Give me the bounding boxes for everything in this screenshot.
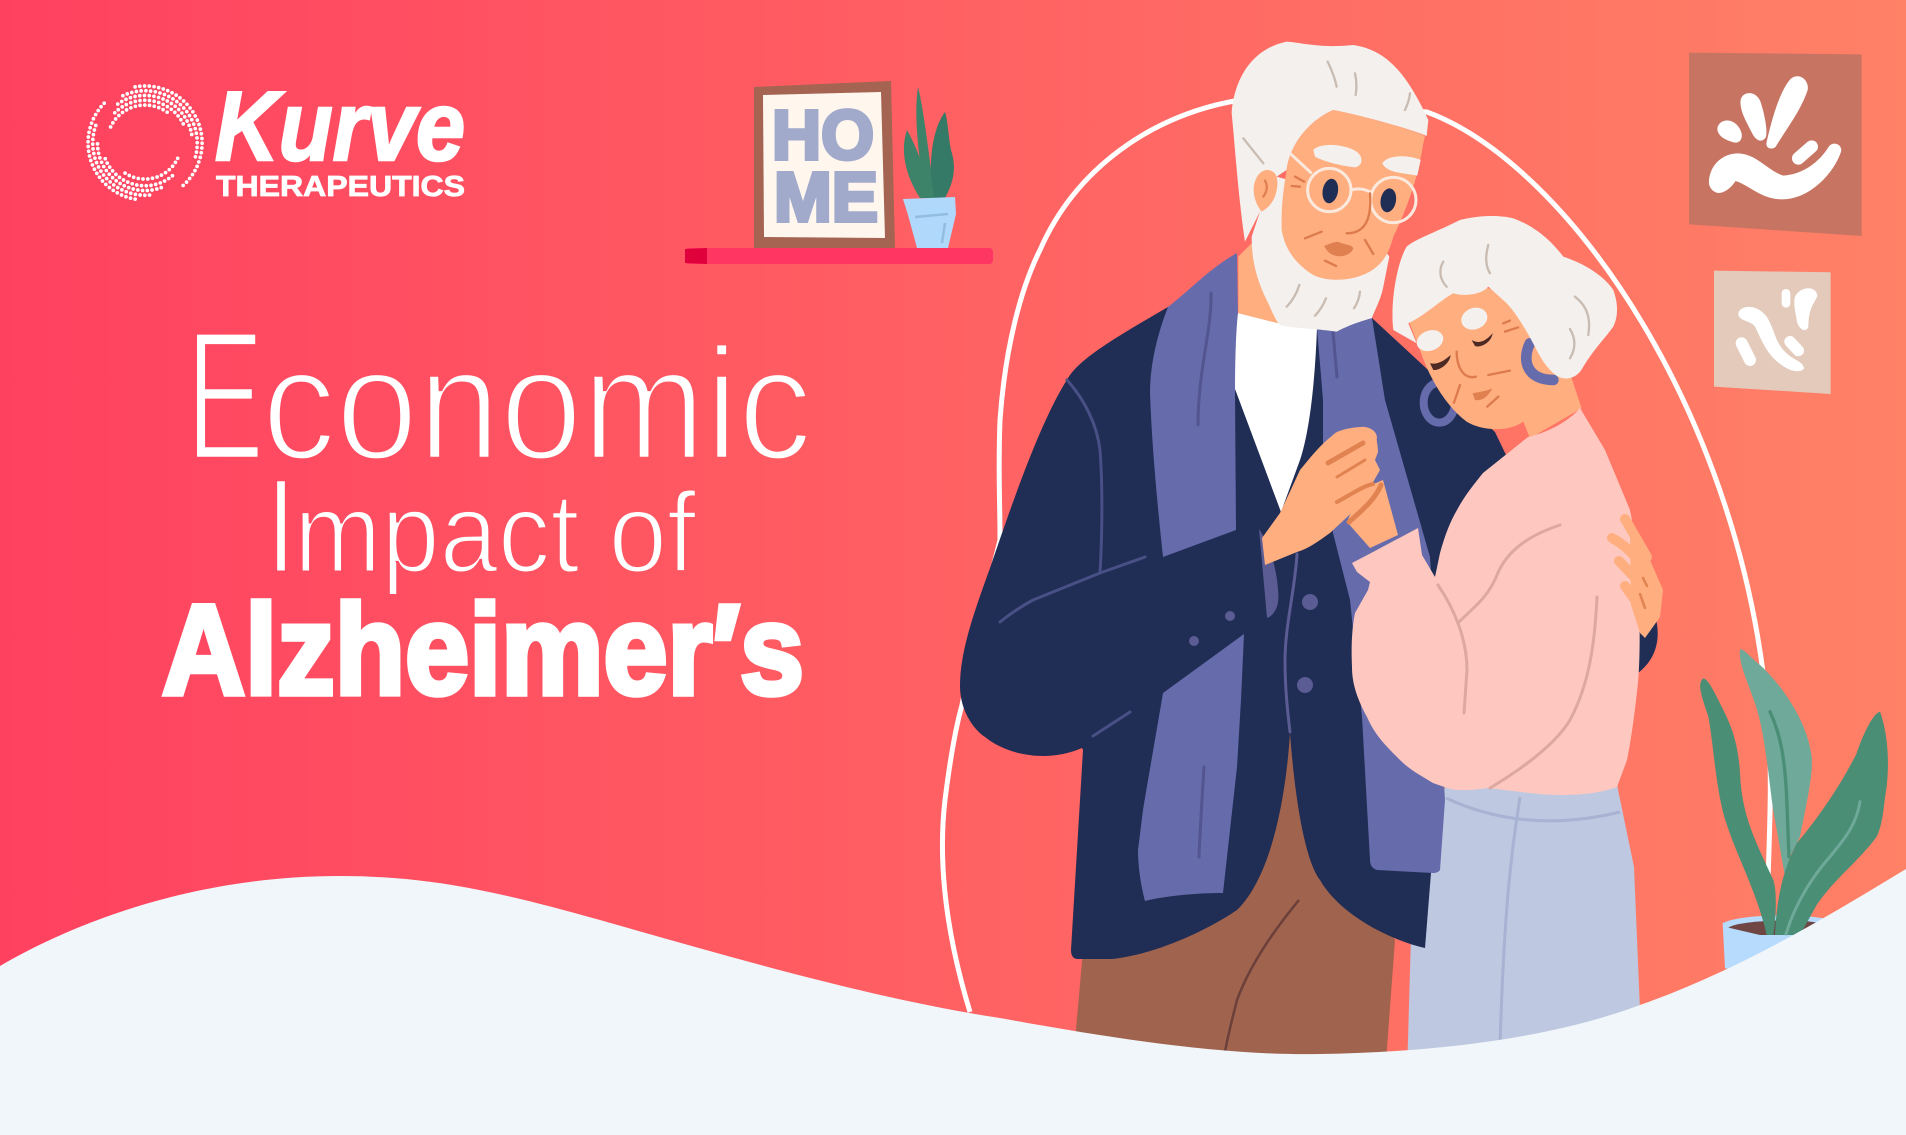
picture frame HOME [754,81,895,249]
frame lettering: HO [772,96,874,174]
man: navy jacket [960,307,1658,959]
white wave at the bottom [0,869,1906,1135]
white arch outline [942,100,1770,1012]
title line: Economic: E [186,292,264,498]
title line: Alzheimer's: Alzheimer′s [162,579,804,722]
frame lettering [772,96,878,236]
man: white shirt [1235,313,1317,512]
woman: blue trousers [1407,780,1640,1075]
hands clasped at chest [1262,427,1398,565]
logo wordmark: Kurve [215,71,465,181]
man: brown trousers [1072,730,1395,1075]
shelf board [685,248,993,264]
wall art: small swirl tile [1714,271,1831,394]
illustration: elderly couple [960,42,1663,1075]
frame lettering: ME [774,158,878,236]
title line: Impact of: mpact of [294,470,696,597]
large potted plant [1700,649,1888,983]
woman: pink sweater [1352,408,1640,795]
man's hand on woman's shoulder [1612,519,1663,638]
man: purple scarf [1138,253,1445,901]
man: clothing seams and buttons [1000,293,1337,857]
title line: Economic: conomic [262,314,812,493]
title: Economic Impact of Alzheimer's [162,292,812,722]
logo subtitle: THERAPEUTICS [216,171,465,203]
man: head, hair, beard and glasses [1232,42,1428,332]
wall art: large splash tile [1689,53,1862,236]
small potted plant [903,87,956,248]
woman: head, hair and earrings [1392,216,1617,438]
wall shelf with frame and plant [685,81,993,264]
icon: dotted swirl [88,86,202,199]
logo: Kurve Therapeutics [88,71,465,203]
title line: Impact of: I [266,452,296,601]
